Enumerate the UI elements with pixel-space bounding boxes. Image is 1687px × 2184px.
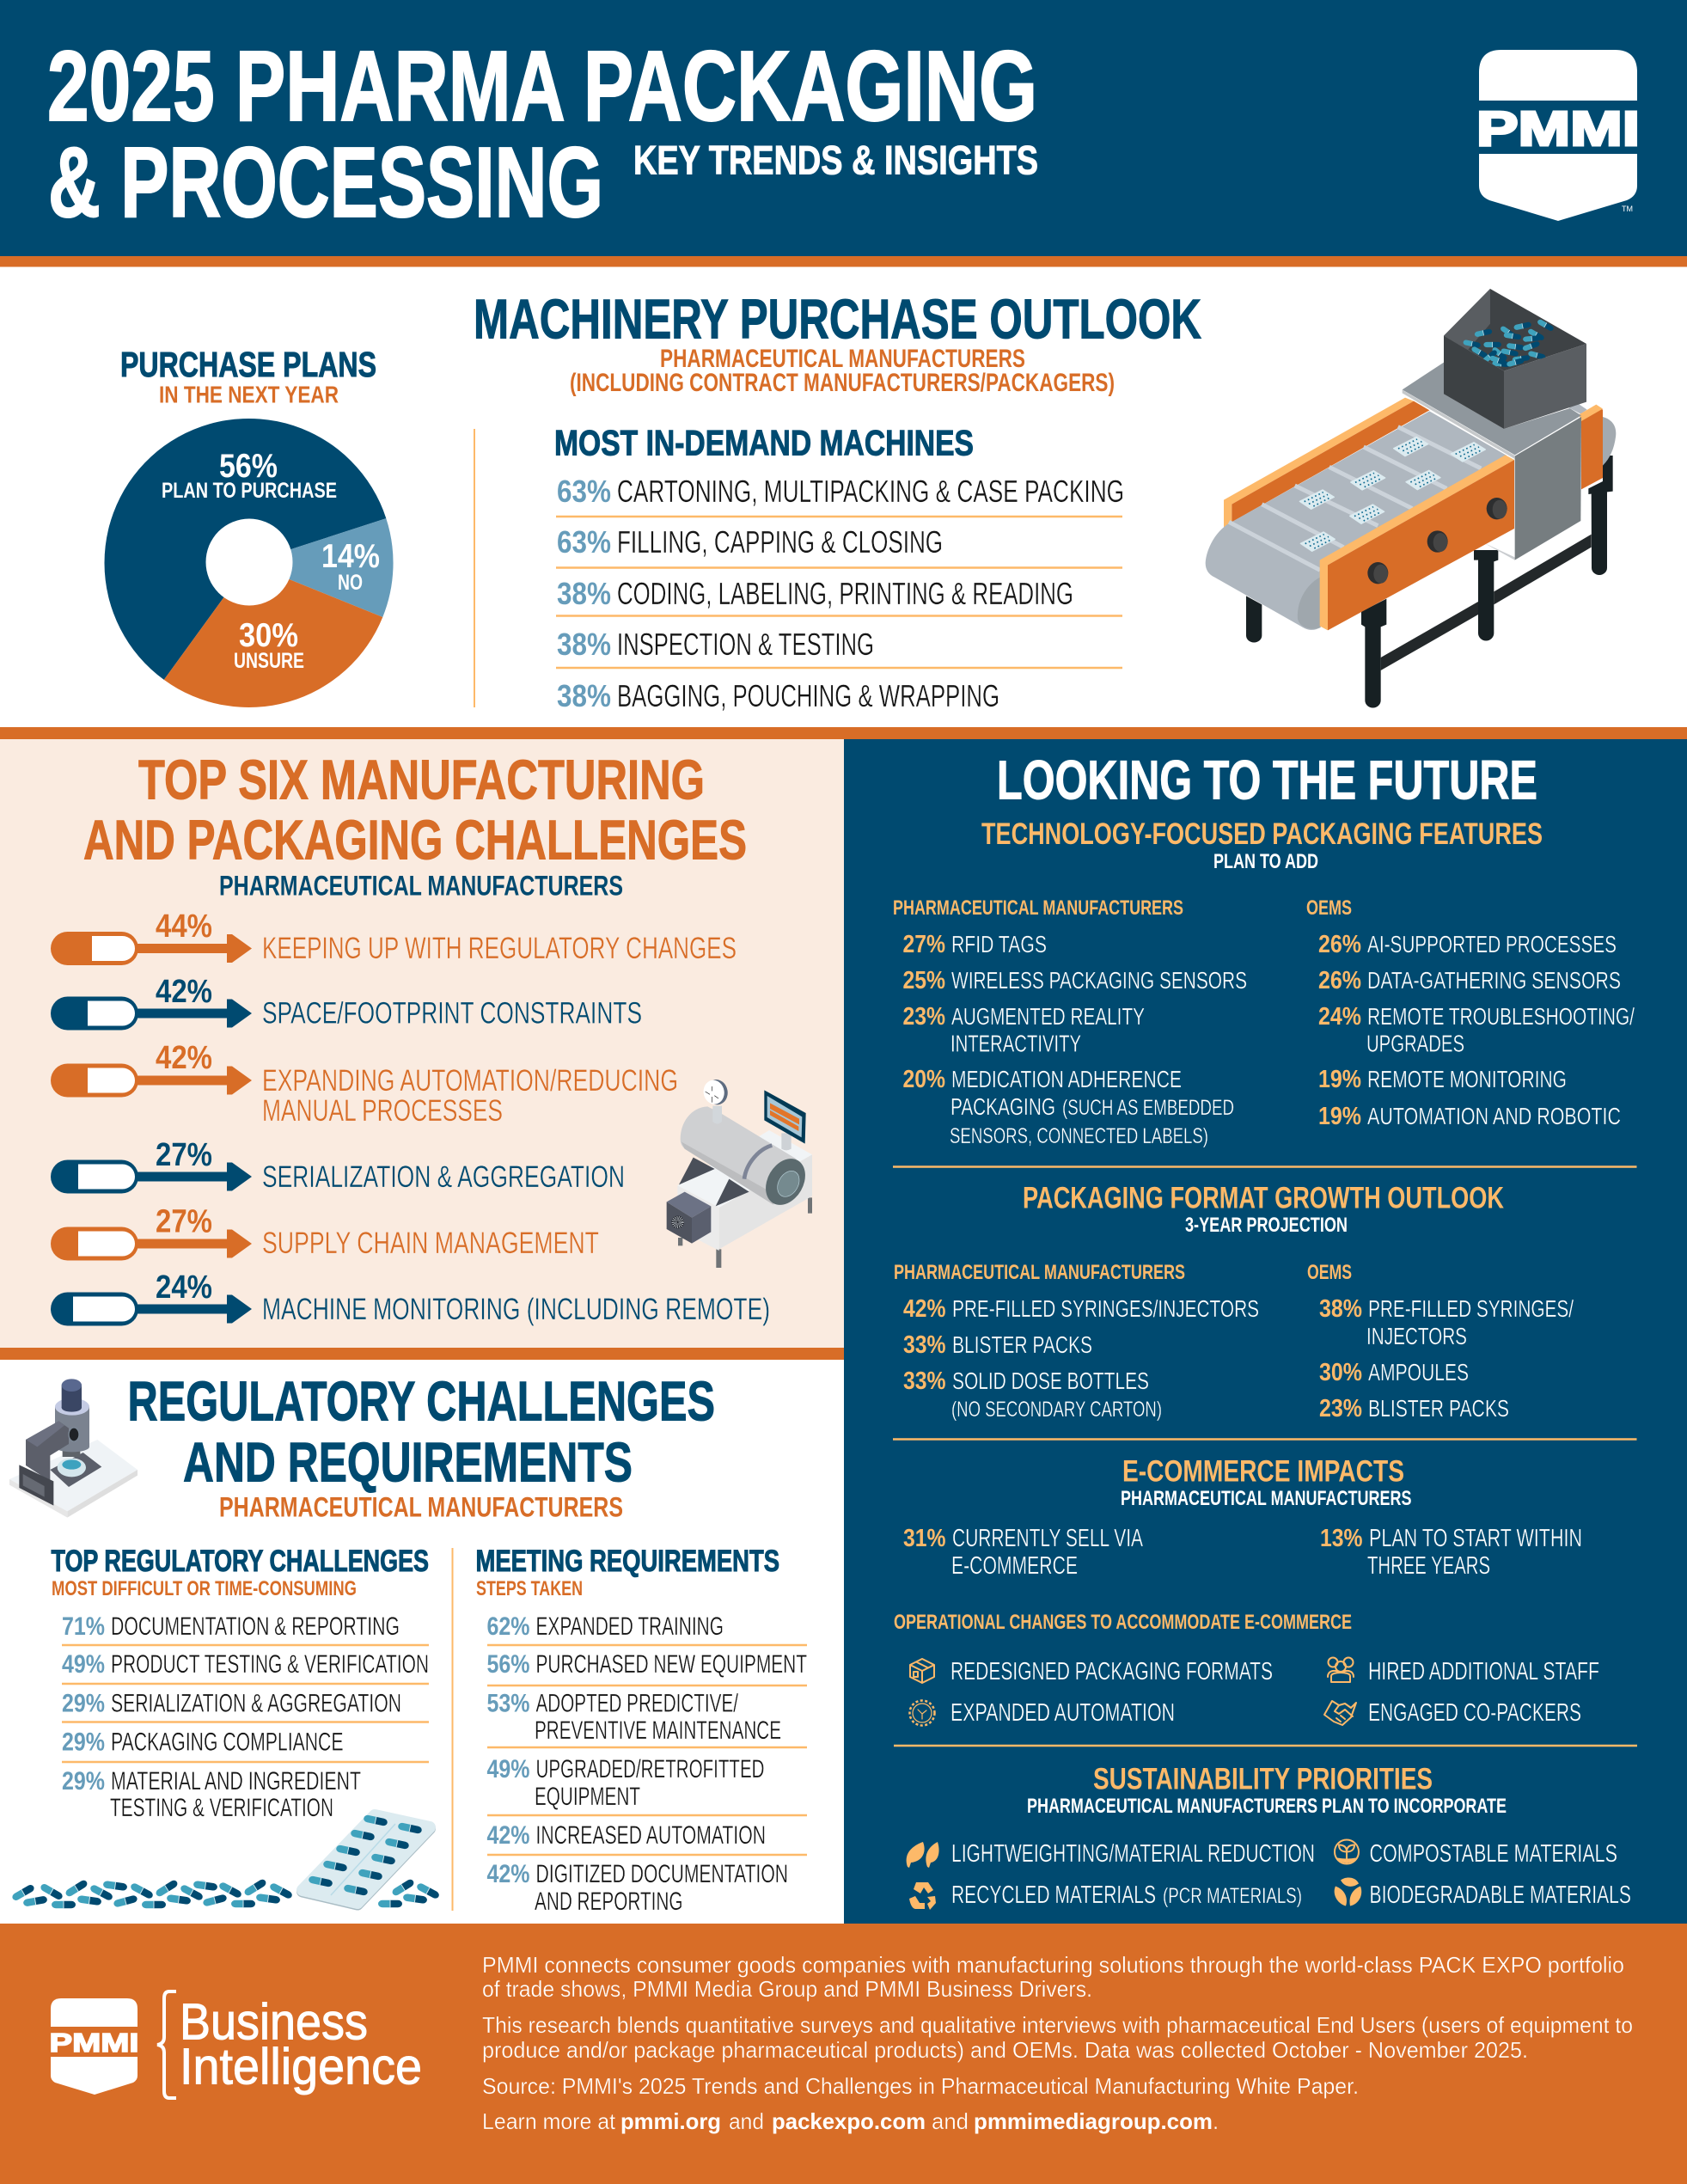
list: most in-demand machines: 38% bbox=[557, 576, 611, 611]
icon: automation gear bbox=[909, 1700, 935, 1726]
logo: PMMI shield bbox=[1476, 50, 1640, 221]
text: about PMMI: . bbox=[1213, 2108, 1219, 2134]
list: most in-demand machines: 63% bbox=[557, 474, 611, 509]
heading: top six challenges: TOP SIX MANUFACTURING bbox=[138, 748, 705, 811]
panel: regulatory challenges and requirements bbox=[0, 1348, 844, 1924]
text: about PMMI: packexpo.com bbox=[772, 2108, 926, 2134]
section: technology-focused packaging features: PACKAGING bbox=[950, 1093, 1055, 1120]
list: top regulatory challenges: SERIALIZATION & AGGREGATION bbox=[111, 1690, 401, 1717]
text: about PMMI: produce and/or package pharmaceutical products) and OEMs. Data was collected October - November 2025. bbox=[482, 2037, 1528, 2063]
row: serialization and aggregation 27%: SERIALIZATION & AGGREGATION bbox=[262, 1160, 625, 1194]
donut chart: purchase plans: 14% bbox=[321, 538, 380, 575]
heading: regulatory challenges and requirements: REGULATORY CHALLENGES bbox=[127, 1370, 715, 1432]
section: technology-focused packaging features: RFID TAGS bbox=[951, 931, 1047, 957]
row: serialization and aggregation 27%: 27% bbox=[156, 1137, 212, 1173]
section: technology-focused packaging features: 25% bbox=[902, 967, 945, 994]
subheading: operational changes: OPERATIONAL CHANGES TO ACCOMMODATE E-COMMERCE bbox=[894, 1611, 1352, 1634]
row: expanding automation 42%: 42% bbox=[156, 1040, 212, 1076]
row: expanding automation 42%: EXPANDING AUTOMATION/REDUCING bbox=[262, 1064, 678, 1098]
list: meeting requirements: UPGRADED/RETROFITTED bbox=[536, 1755, 765, 1783]
logo: PMMI business intelligence: Intelligence bbox=[180, 2039, 422, 2095]
list: top regulatory challenges: MATERIAL AND INGREDIENT bbox=[111, 1767, 361, 1796]
section: technology-focused packaging features: WIRELESS PACKAGING SENSORS bbox=[951, 967, 1247, 994]
section: technology-focused packaging features: 19% bbox=[1318, 1103, 1361, 1130]
text: about PMMI: and bbox=[932, 2108, 969, 2134]
list: top regulatory challenges: MOST DIFFICULT OR TIME-CONSUMING bbox=[52, 1577, 357, 1600]
section: packaging format growth outlook: SOLID DOSE BOTTLES bbox=[952, 1367, 1149, 1394]
list: top regulatory challenges: 29% bbox=[62, 1728, 105, 1757]
row: expanding automation 42% bbox=[51, 1040, 678, 1128]
list: most in-demand machines: 38% bbox=[557, 627, 611, 662]
panel: looking to the future bbox=[844, 739, 1687, 1924]
text: about PMMI: and bbox=[729, 2108, 764, 2134]
icon: leaves bbox=[907, 1842, 939, 1868]
heading: looking to the future: LOOKING TO THE FUTURE bbox=[997, 749, 1537, 811]
list: meeting requirements: 42% bbox=[486, 1860, 529, 1888]
title bbox=[47, 30, 1037, 238]
section: e-commerce impacts: EXPANDED AUTOMATION bbox=[950, 1699, 1175, 1727]
icon: recycling arrows bbox=[909, 1882, 936, 1910]
subheading: pharmaceutical manufacturers: PHARMACEUTICAL MANUFACTURERS bbox=[219, 1492, 623, 1523]
icon: handshake bbox=[1324, 1701, 1356, 1725]
section: packaging format growth outlook: INJECTORS bbox=[1366, 1323, 1467, 1349]
list: most in-demand machines: 63% bbox=[557, 524, 611, 560]
list: most in-demand machines: INSPECTION & TESTING bbox=[617, 627, 874, 662]
list: top regulatory challenges: TOP REGULATORY CHALLENGES bbox=[52, 1545, 429, 1578]
list: meeting requirements: STEPS TAKEN bbox=[476, 1577, 583, 1600]
logo: PMMI business intelligence: Business bbox=[180, 1994, 368, 2051]
panel: top six manufacturing and packaging challenges bbox=[0, 727, 1687, 1348]
text: about PMMI: This research blends quantitative surveys and qualitative interviews with pharmaceutical End Users (users of equipment to bbox=[482, 2012, 1633, 2038]
text: about PMMI: pmmi.org bbox=[620, 2108, 721, 2134]
logo: PMMI business intelligence: PMMI bbox=[50, 2028, 139, 2058]
illustration: microscope bbox=[9, 1379, 138, 1518]
section: e-commerce impacts: 31% bbox=[903, 1525, 946, 1552]
list: top regulatory challenges: TESTING & VERIFICATION bbox=[110, 1794, 333, 1822]
row: keeping up with regulatory changes 44% bbox=[51, 908, 737, 965]
illustration: processing tank bbox=[667, 1078, 813, 1268]
list: most in-demand machines: CODING, LABELING, PRINTING & READING bbox=[617, 576, 1073, 611]
illustration: blister pack bbox=[303, 1814, 430, 1905]
icon: biodegradable leaves bbox=[1335, 1877, 1361, 1906]
list: top regulatory challenges: PRODUCT TESTING & VERIFICATION bbox=[111, 1650, 429, 1679]
section: e-commerce impacts: REDESIGNED PACKAGING FORMATS bbox=[950, 1658, 1273, 1685]
list: meeting requirements: PREVENTIVE MAINTENANCE bbox=[535, 1716, 781, 1745]
section: e-commerce impacts: ENGAGED CO-PACKERS bbox=[1368, 1699, 1581, 1727]
section: technology-focused packaging features: REMOTE MONITORING bbox=[1367, 1066, 1567, 1092]
text: about PMMI bbox=[482, 1952, 1633, 2134]
section: packaging format growth outlook: PACKAGING FORMAT GROWTH OUTLOOK bbox=[1023, 1181, 1504, 1215]
row: space/footprint constraints 42% bbox=[51, 974, 642, 1030]
donut chart: purchase plans: 56% bbox=[219, 448, 278, 485]
list: meeting requirements: DIGITIZED DOCUMENTATION bbox=[536, 1860, 788, 1888]
illustration: conveyor machine bbox=[1206, 289, 1616, 707]
section: packaging format growth outlook: BLISTER PACKS bbox=[1368, 1395, 1509, 1422]
icon: package box bbox=[910, 1659, 934, 1683]
text: about PMMI: pmmimediagroup.com bbox=[974, 2108, 1213, 2134]
section: e-commerce impacts: PHARMACEUTICAL MANUFACTURERS bbox=[1121, 1487, 1411, 1510]
section: technology-focused packaging features: MEDICATION ADHERENCE bbox=[951, 1066, 1182, 1092]
row: machine monitoring 24%: MACHINE MONITORING (INCLUDING REMOTE) bbox=[262, 1293, 770, 1326]
row: space/footprint constraints 42%: SPACE/FOOTPRINT CONSTRAINTS bbox=[262, 997, 642, 1030]
heading: purchase plans: PURCHASE PLANS bbox=[120, 345, 376, 384]
section: packaging format growth outlook: 23% bbox=[1319, 1395, 1362, 1422]
panel: machinery purchase outlook bbox=[0, 266, 1687, 727]
title: 2025 PHARMA PACKAGING bbox=[47, 30, 1037, 142]
row: machine monitoring 24% bbox=[51, 1269, 770, 1326]
icon: staff group bbox=[1328, 1657, 1354, 1682]
donut chart: purchase plans: UNSURE bbox=[234, 649, 304, 673]
text: about PMMI: Source: PMMI's 2025 Trends and Challenges in Pharmaceutical Manufacturing White Paper. bbox=[482, 2073, 1359, 2099]
section: packaging format growth outlook: 33% bbox=[903, 1331, 946, 1359]
section: e-commerce impacts bbox=[894, 1454, 1599, 1727]
list: meeting requirements: 42% bbox=[486, 1821, 529, 1850]
section: e-commerce impacts: E-COMMERCE bbox=[951, 1552, 1078, 1580]
subheading: pharmaceutical manufacturers bbox=[570, 345, 1115, 397]
row: keeping up with regulatory changes 44%: KEEPING UP WITH REGULATORY CHANGES bbox=[262, 932, 737, 965]
donut chart: purchase plans: PLAN TO PURCHASE bbox=[162, 479, 337, 503]
list: meeting requirements: EQUIPMENT bbox=[535, 1783, 640, 1811]
section: packaging format growth outlook: PHARMACEUTICAL MANUFACTURERS bbox=[894, 1261, 1185, 1284]
section: technology-focused packaging features: 23% bbox=[902, 1003, 945, 1031]
list: meeting requirements: ADOPTED PREDICTIVE/ bbox=[536, 1690, 738, 1717]
section: technology-focused packaging features: 27% bbox=[902, 931, 945, 958]
heading: machinery purchase outlook: MACHINERY PURCHASE OUTLOOK bbox=[474, 287, 1201, 351]
title: & PROCESSING bbox=[48, 126, 603, 238]
subheading: pharmaceutical manufacturers: PHARMACEUTICAL MANUFACTURERS bbox=[219, 870, 623, 901]
heading: regulatory challenges and requirements: AND REQUIREMENTS bbox=[183, 1430, 633, 1494]
section: packaging format growth outlook: 42% bbox=[903, 1295, 946, 1323]
list: top regulatory challenges: 49% bbox=[62, 1650, 105, 1679]
section: packaging format growth outlook: PRE-FILLED SYRINGES/ bbox=[1368, 1295, 1574, 1322]
list: meeting requirements: PURCHASED NEW EQUIPMENT bbox=[536, 1650, 807, 1679]
section: packaging format growth outlook: AMPOULES bbox=[1368, 1359, 1469, 1386]
section: packaging format growth outlook bbox=[894, 1181, 1574, 1422]
section: packaging format growth outlook: (NO SECONDARY CARTON) bbox=[951, 1398, 1162, 1422]
list: meeting requirements: 53% bbox=[486, 1690, 529, 1717]
section: packaging format growth outlook: 33% bbox=[903, 1367, 946, 1395]
row: supply chain management 27% bbox=[51, 1203, 599, 1260]
section: sustainability priorities: RECYCLED MATERIALS bbox=[951, 1881, 1156, 1909]
row: machine monitoring 24%: 24% bbox=[156, 1269, 212, 1306]
donut chart: purchase plans: 30% bbox=[239, 617, 298, 654]
section: technology-focused packaging features: PLAN TO ADD bbox=[1213, 850, 1318, 873]
list: most in-demand machines: 38% bbox=[557, 678, 611, 713]
heading: purchase plans: IN THE NEXT YEAR bbox=[159, 382, 339, 407]
list: most in-demand machines: FILLING, CAPPING & CLOSING bbox=[617, 524, 943, 560]
section: technology-focused packaging features: 26% bbox=[1318, 931, 1361, 958]
list: top regulatory challenges: 71% bbox=[62, 1612, 105, 1641]
section: e-commerce impacts: 13% bbox=[1320, 1525, 1363, 1552]
header banner bbox=[0, 0, 1687, 266]
row: keeping up with regulatory changes 44%: 44% bbox=[156, 908, 212, 945]
logo: PMMI business intelligence bbox=[50, 1991, 422, 2098]
list: meeting requirements bbox=[476, 1545, 807, 1916]
section: sustainability priorities: LIGHTWEIGHTING/MATERIAL REDUCTION bbox=[951, 1840, 1315, 1868]
list: meeting requirements: MEETING REQUIREMENTS bbox=[476, 1545, 779, 1578]
section: technology-focused packaging features: INTERACTIVITY bbox=[950, 1030, 1081, 1057]
section: technology-focused packaging features: 26% bbox=[1318, 967, 1361, 994]
heading: top six challenges bbox=[83, 748, 747, 872]
panel: footer bbox=[0, 1924, 1687, 2184]
heading: top six challenges: AND PACKAGING CHALLENGES bbox=[83, 808, 747, 872]
section: technology-focused packaging features: 19% bbox=[1318, 1066, 1361, 1093]
subheading: pharmaceutical manufacturers: PHARMACEUTICAL MANUFACTURERS bbox=[660, 345, 1025, 373]
list: most in-demand machines bbox=[554, 423, 1124, 713]
section: technology-focused packaging features: UPGRADES bbox=[1366, 1030, 1464, 1057]
subheading: pharmaceutical manufacturers: (INCLUDING CONTRACT MANUFACTURERS/PACKAGERS) bbox=[570, 369, 1115, 397]
heading: purchase plans bbox=[120, 345, 376, 407]
logo: PMMI shield: TM bbox=[1622, 205, 1633, 213]
section: packaging format growth outlook: PRE-FILLED SYRINGES/INJECTORS bbox=[952, 1295, 1259, 1322]
section: technology-focused packaging features: SENSORS, CONNECTED LABELS) bbox=[950, 1124, 1208, 1148]
list: meeting requirements: 62% bbox=[486, 1612, 529, 1641]
section: e-commerce impacts: E-COMMERCE IMPACTS bbox=[1122, 1454, 1404, 1489]
section: packaging format growth outlook: 30% bbox=[1319, 1359, 1362, 1386]
list: meeting requirements: AND REPORTING bbox=[535, 1887, 682, 1916]
list: top regulatory challenges: PACKAGING COMPLIANCE bbox=[111, 1728, 344, 1757]
list: most in-demand machines: MOST IN-DEMAND MACHINES bbox=[554, 423, 974, 462]
section: technology-focused packaging features: 24% bbox=[1318, 1003, 1361, 1031]
text: about PMMI: of trade shows, PMMI Media Group and PMMI Business Drivers. bbox=[482, 1976, 1092, 2002]
section: packaging format growth outlook: 38% bbox=[1319, 1295, 1362, 1323]
section: e-commerce impacts: CURRENTLY SELL VIA bbox=[952, 1525, 1143, 1552]
subtitle: KEY TRENDS & INSIGHTS bbox=[633, 138, 1038, 182]
row: supply chain management 27%: SUPPLY CHAIN MANAGEMENT bbox=[262, 1227, 599, 1260]
row: supply chain management 27%: 27% bbox=[156, 1203, 212, 1239]
section: packaging format growth outlook: BLISTER PACKS bbox=[952, 1331, 1092, 1358]
section: technology-focused packaging features: 20% bbox=[902, 1066, 945, 1093]
section: e-commerce impacts: THREE YEARS bbox=[1367, 1552, 1490, 1580]
section: sustainability priorities bbox=[907, 1762, 1631, 1910]
text: about PMMI: Learn more at bbox=[482, 2108, 616, 2134]
donut chart: purchase plans: NO bbox=[338, 571, 363, 595]
row: space/footprint constraints 42%: 42% bbox=[156, 974, 212, 1010]
section: e-commerce impacts: PLAN TO START WITHIN bbox=[1369, 1525, 1582, 1552]
list: most in-demand machines: BAGGING, POUCHING & WRAPPING bbox=[617, 678, 999, 713]
row: expanding automation 42%: MANUAL PROCESSES bbox=[262, 1094, 503, 1128]
icon: compost sprout bbox=[1335, 1839, 1359, 1863]
list: top regulatory challenges: DOCUMENTATION & REPORTING bbox=[111, 1612, 400, 1641]
section: technology-focused packaging features: PHARMACEUTICAL MANUFACTURERS bbox=[893, 896, 1183, 920]
list: top regulatory challenges: 29% bbox=[62, 1767, 105, 1796]
section: technology-focused packaging features: OEMS bbox=[1306, 896, 1352, 920]
section: technology-focused packaging features bbox=[893, 817, 1635, 1148]
logo: PMMI shield: PMMI bbox=[1476, 101, 1640, 156]
heading: regulatory challenges and requirements bbox=[127, 1370, 715, 1494]
section: technology-focused packaging features: TECHNOLOGY-FOCUSED PACKAGING FEATURES bbox=[981, 817, 1543, 851]
list: meeting requirements: 56% bbox=[486, 1650, 529, 1679]
section: technology-focused packaging features: (SUCH AS EMBEDDED bbox=[1062, 1096, 1234, 1120]
list: meeting requirements: 49% bbox=[486, 1755, 529, 1783]
section: sustainability priorities: PHARMACEUTICAL MANUFACTURERS PLAN TO INCORPORATE bbox=[1027, 1795, 1507, 1818]
section: packaging format growth outlook: 3-YEAR PROJECTION bbox=[1185, 1214, 1348, 1237]
section: technology-focused packaging features: AUGMENTED REALITY bbox=[951, 1003, 1145, 1030]
list: most in-demand machines: CARTONING, MULTIPACKING & CASE PACKING bbox=[617, 474, 1124, 509]
row: serialization and aggregation 27% bbox=[51, 1137, 625, 1194]
text: about PMMI: PMMI connects consumer goods companies with manufacturing solutions through the world-class PACK EXPO portfolio bbox=[482, 1952, 1624, 1978]
section: sustainability priorities: (PCR MATERIALS) bbox=[1163, 1884, 1302, 1908]
section: packaging format growth outlook: OEMS bbox=[1307, 1261, 1352, 1284]
list: meeting requirements: EXPANDED TRAINING bbox=[536, 1612, 724, 1641]
section: e-commerce impacts: HIRED ADDITIONAL STAFF bbox=[1368, 1658, 1599, 1685]
list: top regulatory challenges bbox=[52, 1545, 429, 1822]
section: sustainability priorities: SUSTAINABILITY PRIORITIES bbox=[1093, 1762, 1433, 1796]
illustration: scattered capsules bbox=[11, 1878, 440, 1908]
list: top regulatory challenges: 29% bbox=[62, 1690, 105, 1717]
list: meeting requirements: INCREASED AUTOMATION bbox=[536, 1821, 766, 1850]
donut chart: purchase plans bbox=[105, 419, 394, 707]
